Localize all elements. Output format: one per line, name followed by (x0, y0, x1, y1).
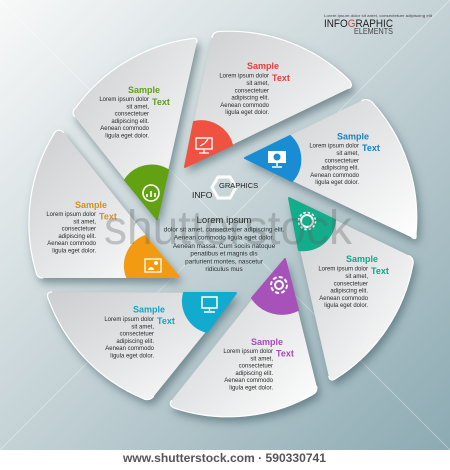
teal wedge (289, 198, 335, 250)
panel: green segment (73, 38, 197, 220)
purple heading: Text (276, 349, 294, 359)
cyan body text: Lorem ipsum dolor (104, 317, 154, 323)
center text block: penatibus et magnis dis (190, 250, 258, 258)
green body text: Lorem ipsum dolor (99, 97, 149, 103)
orange heading: Text (99, 212, 117, 222)
cyan body text: sit amet, (131, 324, 154, 330)
watermark: shutterstock (104, 202, 353, 255)
orange body text: consectetuer (62, 227, 96, 233)
orange body text: adipiscing elit. (58, 234, 96, 240)
blue body text: consectetuer (325, 158, 359, 164)
cyan body text: consectetuer (120, 332, 154, 338)
teal body text: adipiscing elit. (330, 289, 368, 295)
blue heading: Text (362, 143, 380, 153)
panel: teal segment (288, 197, 413, 380)
orange body text: Aenean commodo (47, 241, 97, 247)
icon: target arrows (271, 277, 287, 293)
footer: www.shutterstock.com · 590330741 (122, 453, 327, 465)
center text block: dolor sit amet, consectetuer adipiscing elit. (164, 226, 284, 234)
top-right title (324, 13, 433, 36)
center logo: info graphics: INFO (192, 190, 213, 200)
green heading: Sample (128, 85, 160, 95)
icon: monitor (202, 297, 217, 312)
purple body text: Lorem ipsum dolor (223, 349, 273, 355)
red body text: ligula eget dolor. (225, 110, 269, 116)
purple body text: sit amet, (250, 356, 273, 362)
teal body text: sit amet, (345, 274, 368, 280)
purple wedge (252, 259, 298, 314)
teal heading: Sample (346, 254, 378, 264)
orange wedge (125, 236, 179, 277)
icon: monitor with pie (268, 151, 286, 167)
red heading: Text (272, 73, 290, 83)
blue body text: Aenean commodo (310, 173, 360, 179)
red body text: consectetuer (235, 88, 269, 94)
top-right title: INFOGRAPHIC (324, 18, 393, 30)
center text block: Aenean commodo ligula eget dolor. (174, 234, 274, 242)
red body text: adipiscing elit. (231, 96, 269, 102)
center logo: info graphics: GRAPHICS (219, 181, 258, 190)
teal heading: Text (371, 266, 389, 276)
center logo: info graphics (192, 177, 258, 200)
center text block: ridiculus mus (205, 266, 243, 273)
icon: gear (298, 212, 316, 230)
green body text: Aenean commodo (100, 126, 150, 132)
icon: monitor (196, 138, 212, 153)
purple body text: consectetuer (239, 364, 273, 370)
teal body text: ligula eget dolor. (324, 303, 368, 309)
red body text: sit amet, (246, 81, 269, 87)
orange heading: Sample (75, 200, 107, 210)
center text block: parturient montes, nascetur (185, 258, 264, 266)
blue heading: Sample (337, 132, 369, 142)
center text block (164, 215, 284, 273)
blue body text: sit amet, (336, 151, 359, 157)
center text block: Lorem ipsum (197, 215, 252, 226)
footer (0, 450, 450, 470)
panel: orange segment (29, 130, 180, 278)
orange body text: ligula eget dolor. (52, 248, 96, 254)
red heading: Sample (247, 61, 279, 71)
green body text: ligula eget dolor. (105, 134, 149, 140)
center text block: Aenean massa. Cum sociis natoque (173, 243, 276, 250)
panel: red segment (184, 31, 351, 168)
top-right title: ELEMENTS (354, 27, 393, 36)
orange body text: Lorem ipsum dolor (46, 212, 96, 218)
teal body text: Aenean commodo (319, 296, 369, 302)
green body text: sit amet, (126, 104, 149, 110)
blue body text: adipiscing elit. (321, 166, 359, 172)
blue body text: ligula eget dolor. (315, 180, 359, 186)
cyan heading: Text (157, 316, 175, 326)
purple body text: Aenean commodo (224, 378, 274, 384)
green heading: Text (152, 97, 170, 107)
purple body text: ligula eget dolor. (229, 386, 273, 392)
red wedge (185, 121, 232, 167)
green body text: consectetuer (115, 112, 149, 118)
green body text: adipiscing elit. (111, 119, 149, 125)
red body text: Aenean commodo (220, 103, 270, 109)
blue body text: Lorem ipsum dolor (309, 144, 359, 150)
purple body text: adipiscing elit. (235, 371, 273, 377)
cyan body text: adipiscing elit. (116, 339, 154, 345)
cyan wedge (183, 293, 236, 332)
icon: picture (145, 259, 161, 272)
cyan body text: ligula eget dolor. (110, 354, 154, 360)
purple heading: Sample (251, 337, 283, 347)
red body text: Lorem ipsum dolor (219, 74, 269, 80)
green wedge (125, 166, 168, 219)
icon: chart ring (143, 185, 159, 201)
panel: purple segment (170, 258, 317, 417)
blue wedge (245, 136, 300, 181)
teal body text: consectetuer (334, 281, 368, 287)
top-right title: Lorem ipsum dolor sit amet, consectetuer adipiscing elit (324, 13, 433, 18)
orange body text: sit amet, (73, 219, 96, 225)
panel: blue segment (244, 100, 417, 239)
panel: cyan segment (48, 292, 237, 400)
cyan body text: Aenean commodo (105, 346, 155, 352)
cyan heading: Sample (133, 304, 165, 314)
teal body text: Lorem ipsum dolor (318, 267, 368, 273)
